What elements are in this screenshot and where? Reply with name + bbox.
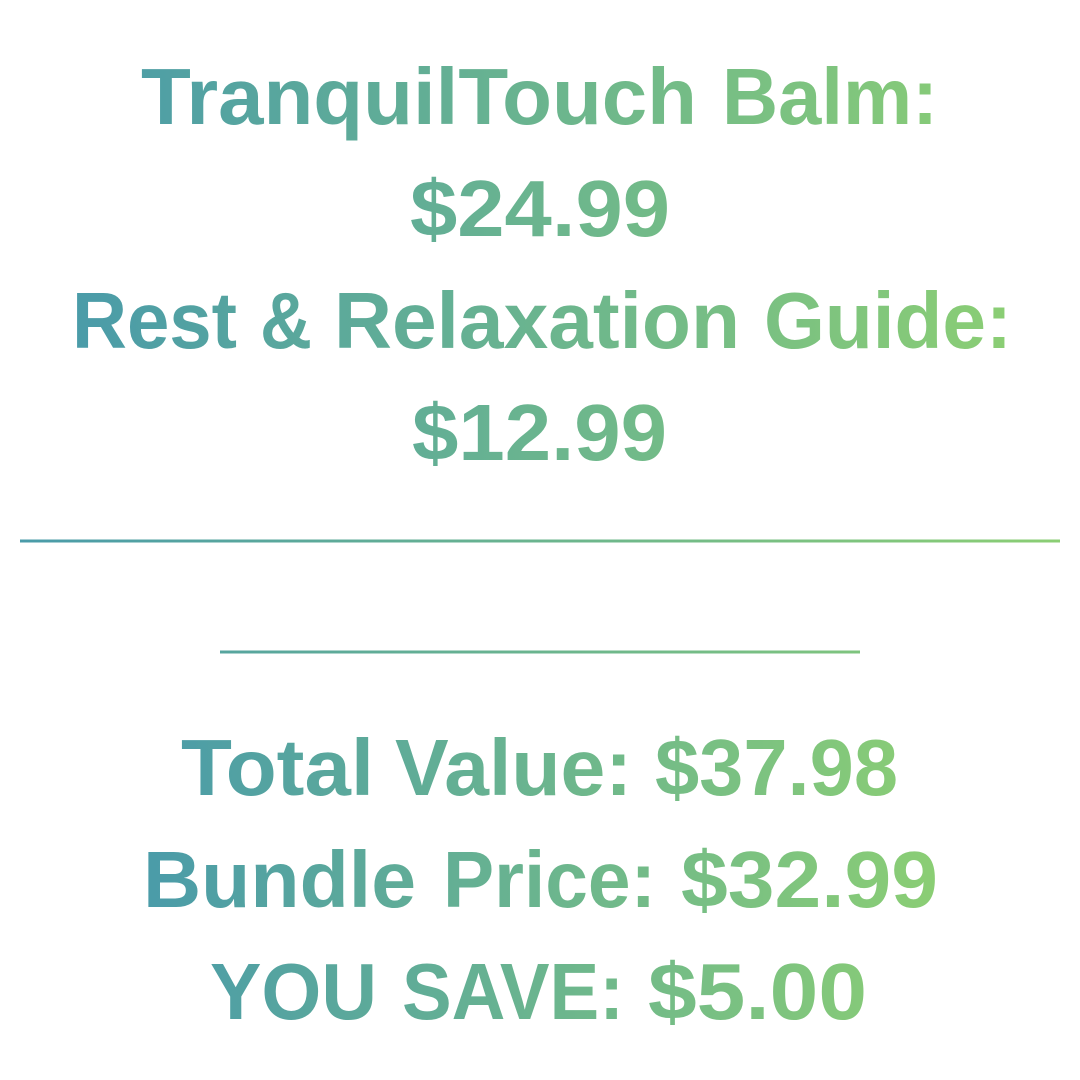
guide label: & bbox=[260, 276, 312, 365]
bundle price: Bundle bbox=[143, 835, 416, 924]
balm price: $24.99 bbox=[410, 164, 670, 253]
you save: $5.00 bbox=[648, 947, 867, 1036]
balm label: TranquilTouch bbox=[141, 52, 697, 141]
total value: Total bbox=[181, 723, 374, 812]
bundle price: $32.99 bbox=[681, 835, 938, 924]
you save bbox=[210, 947, 867, 1036]
guide label bbox=[72, 276, 1012, 365]
you save: YOU bbox=[210, 947, 377, 1036]
guide price: $12.99 bbox=[412, 388, 667, 477]
total value: $37.98 bbox=[655, 723, 898, 812]
bundle price: Price: bbox=[443, 835, 656, 924]
balm label bbox=[141, 52, 938, 141]
total value: Value: bbox=[395, 723, 632, 812]
guide label: Guide: bbox=[764, 276, 1012, 365]
total value bbox=[181, 723, 898, 812]
upper divider line bbox=[20, 540, 1060, 542]
lower divider line bbox=[220, 650, 860, 654]
bundle summary text block bbox=[143, 723, 938, 1036]
balm label: Balm: bbox=[722, 52, 938, 141]
guide label: Relaxation bbox=[334, 276, 740, 365]
bundle price bbox=[143, 835, 938, 924]
guide label: Rest bbox=[72, 276, 237, 365]
you save: SAVE: bbox=[402, 947, 624, 1036]
item prices text block bbox=[72, 52, 1012, 477]
